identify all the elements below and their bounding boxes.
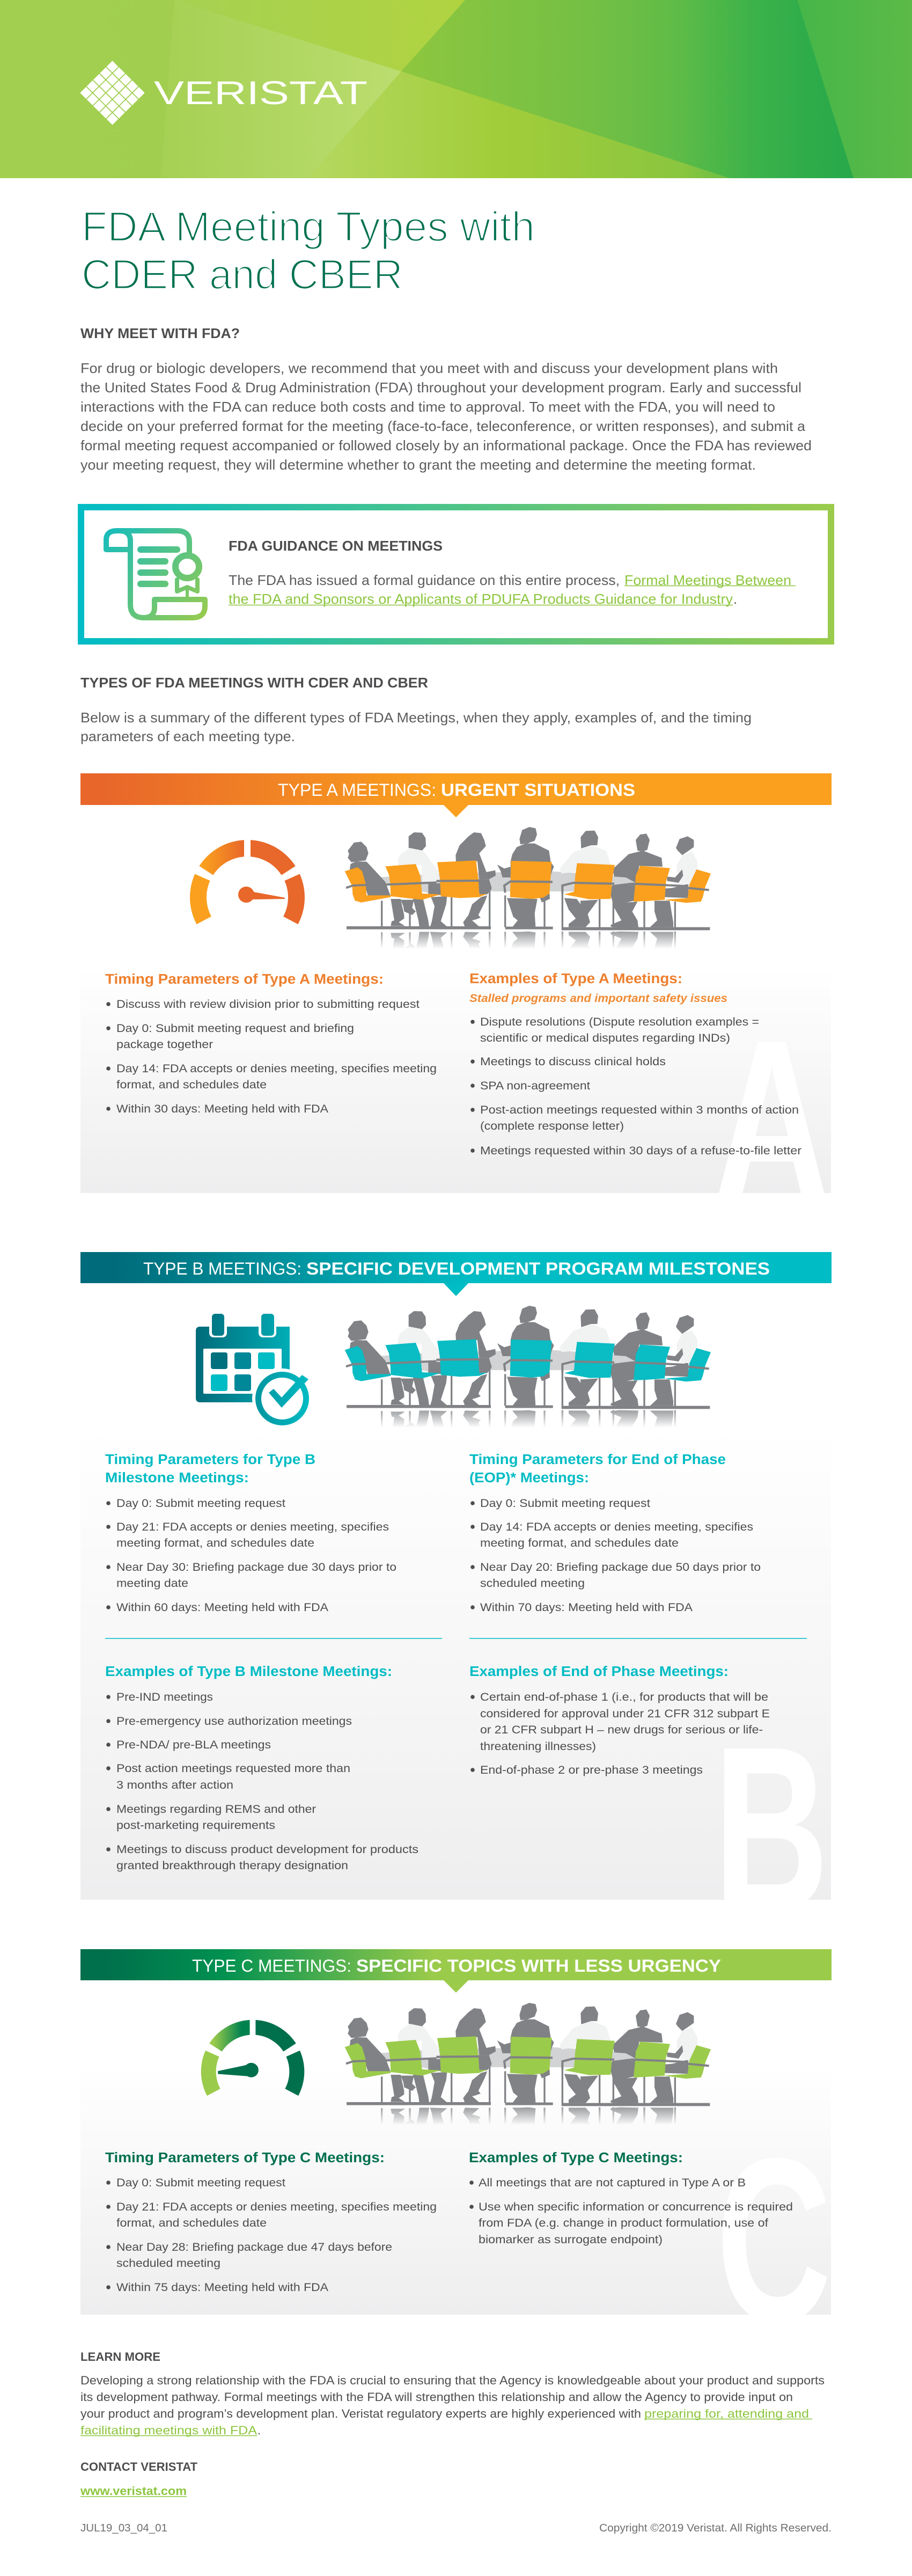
title: FDA Meeting Types with bbox=[82, 203, 535, 250]
list: examples EOP items: considered for approval under 21 CFR 312 subpart E bbox=[480, 1707, 770, 1720]
list: examples milestone items: granted breakthrough therapy designation bbox=[116, 1859, 348, 1872]
list: timing milestone items: Within 60 days: Meeting held with FDA bbox=[116, 1601, 329, 1614]
list: timing C items: Within 75 days: Meeting held with FDA bbox=[116, 2281, 329, 2294]
list: examples EOP items: or 21 CFR subpart H – new drugs for serious or life- bbox=[480, 1723, 763, 1736]
list: examples items: (complete response letter) bbox=[480, 1119, 624, 1132]
list: examples C items: biomarker as surrogate endpoint) bbox=[479, 2233, 663, 2246]
text block: guidance with link: . bbox=[733, 591, 737, 607]
text block: intro paragraph: the United States Food & Drug Administration (FDA) throughout your development program. Early and successful bbox=[80, 379, 801, 396]
illustration: meeting silhouettes bbox=[345, 2003, 711, 2150]
list: timing EOP items bbox=[470, 1497, 761, 1614]
big letter C: C bbox=[716, 2110, 832, 2371]
heading: timing EOP bbox=[469, 1452, 726, 1485]
subheading: stalled programs: Stalled programs and important safety issues bbox=[469, 992, 727, 1005]
list: examples C items: Use when specific information or concurrence is required bbox=[479, 2200, 793, 2213]
title bbox=[82, 203, 535, 298]
list: examples EOP items: threatening illnesses) bbox=[480, 1740, 596, 1753]
big letter A: A bbox=[712, 991, 831, 1253]
text block: intro paragraph: interactions with the FDA can reduce both costs and time to approval. To meet with the FDA, you will need to bbox=[80, 399, 775, 415]
list: timing C items bbox=[106, 2176, 437, 2294]
list: examples milestone items: Meetings regarding REMS and other bbox=[116, 1803, 316, 1816]
list: examples milestone items: Pre-IND meetings bbox=[116, 1690, 213, 1703]
panel: Type A meetings bbox=[80, 773, 832, 1193]
list: examples milestone items: 3 months after action bbox=[116, 1779, 233, 1791]
text block: intro paragraph bbox=[80, 360, 812, 473]
list: examples items: Meetings requested within 30 days of a refuse-to-file letter bbox=[480, 1144, 801, 1157]
list: timing items: Day 0: Submit meeting request and briefing bbox=[116, 1022, 354, 1035]
text block: summary: parameters of each meeting type. bbox=[80, 728, 295, 744]
list: examples items: Post-action meetings requested within 3 months of action bbox=[480, 1103, 799, 1116]
section: why meet with FDA bbox=[80, 325, 812, 473]
section: learn more bbox=[80, 2350, 825, 2437]
list: timing C items: scheduled meeting bbox=[116, 2257, 220, 2270]
title: CDER and CBER bbox=[82, 251, 403, 298]
banner: Type A bbox=[80, 773, 832, 817]
panel: FDA guidance on meetings bbox=[81, 507, 831, 641]
heading: types of meetings: TYPES OF FDA MEETINGS WITH CDER AND CBER bbox=[80, 675, 428, 691]
link: website: www.veristat.com bbox=[80, 2484, 187, 2498]
column: timing end of phase bbox=[469, 1452, 761, 1614]
section: types of meetings intro bbox=[80, 675, 752, 744]
text block: learn more paragraph: Developing a strong relationship with the FDA is crucial to ensuring that the Agency is knowledgeable about your product and supports bbox=[80, 2374, 825, 2387]
list: timing milestone items: meeting format, and schedules date bbox=[116, 1536, 314, 1549]
list: examples EOP items: End-of-phase 2 or pre-phase 3 meetings bbox=[480, 1763, 703, 1776]
list: examples milestone items: Post action meetings requested more than bbox=[116, 1762, 350, 1775]
list: examples items: Meetings to discuss clinical holds bbox=[480, 1055, 666, 1068]
text block: learn more paragraph: facilitating meetings with FDA bbox=[80, 2424, 257, 2437]
list: examples C items bbox=[469, 2176, 793, 2246]
list: timing items: format, and schedules date bbox=[116, 1078, 267, 1091]
icon: slow gauge bbox=[201, 2020, 304, 2096]
column: timing parameters bbox=[105, 972, 437, 1115]
heading: examples EOP: Examples of End of Phase Meetings: bbox=[469, 1664, 729, 1679]
heading: timing type C: Timing Parameters of Type C Meetings: bbox=[105, 2150, 385, 2165]
heading: learn more: LEARN MORE bbox=[80, 2350, 160, 2363]
banner: Type A: TYPE A MEETINGS: bbox=[278, 780, 436, 800]
list: timing C items: Near Day 28: Briefing package due 47 days before bbox=[116, 2241, 392, 2253]
list: examples items: scientific or medical disputes regarding INDs) bbox=[480, 1031, 730, 1044]
icon: scroll with seal bbox=[106, 531, 205, 618]
text block: intro paragraph: For drug or biologic developers, we recommend that you meet with and discuss your development plans with bbox=[80, 360, 778, 376]
list: timing EOP items: Within 70 days: Meeting held with FDA bbox=[480, 1601, 693, 1614]
list: examples items: Dispute resolutions (Dispute resolution examples = bbox=[480, 1015, 759, 1028]
big letter B: B bbox=[714, 1698, 829, 1959]
column: examples end of phase bbox=[469, 1664, 770, 1776]
list: timing EOP items: Near Day 20: Briefing package due 50 days prior to bbox=[480, 1561, 761, 1574]
list: examples EOP items: Certain end-of-phase 1 (i.e., for products that will be bbox=[480, 1690, 768, 1703]
icon: calendar with check bbox=[196, 1314, 314, 1429]
list: timing milestone items: Day 0: Submit meeting request bbox=[116, 1497, 285, 1510]
list: timing milestone items: Near Day 30: Briefing package due 30 days prior to bbox=[116, 1561, 396, 1574]
logo: Veristat bbox=[80, 61, 367, 125]
heading: guidance: FDA GUIDANCE ON MEETINGS bbox=[229, 538, 443, 554]
list: timing C items: Day 21: FDA accepts or denies meeting, specifies meeting bbox=[116, 2200, 437, 2213]
list: timing EOP items: Day 14: FDA accepts or denies meeting, specifies bbox=[480, 1520, 753, 1533]
panel: Type C meetings bbox=[80, 1949, 832, 2315]
list: timing EOP items: meeting format, and schedules date bbox=[480, 1536, 679, 1549]
text block: summary bbox=[80, 709, 752, 744]
header banner bbox=[0, 0, 912, 178]
heading: timing type B: Milestone Meetings: bbox=[105, 1470, 249, 1485]
banner: Type C bbox=[80, 1949, 832, 1993]
column: examples bbox=[469, 971, 801, 1157]
logo wordmark: VERISTAT bbox=[154, 75, 367, 111]
list: examples C items: from FDA (e.g. change in product formulation, use of bbox=[479, 2216, 768, 2229]
heading: timing EOP: Timing Parameters for End of Phase bbox=[469, 1452, 726, 1467]
list: timing items: Within 30 days: Meeting held with FDA bbox=[116, 1102, 329, 1115]
heading: timing type B: Timing Parameters for Type B bbox=[105, 1452, 315, 1467]
footer: copyright: Copyright ©2019 Veristat. All Rights Reserved. bbox=[599, 2522, 832, 2534]
column: timing type C bbox=[105, 2150, 437, 2294]
list: timing C items: Day 0: Submit meeting request bbox=[116, 2176, 285, 2189]
banner: Type B: TYPE B MEETINGS: bbox=[143, 1259, 301, 1278]
list: timing milestone items: Day 21: FDA accepts or denies meeting, specifies bbox=[116, 1520, 389, 1533]
text block: guidance with link: The FDA has issued a formal guidance on this entire process, bbox=[229, 572, 620, 588]
text block: learn more paragraph: your product and program’s development plan. Veristat regulatory experts are highly experienced with bbox=[80, 2407, 641, 2420]
banner: Type C: TYPE C MEETINGS: bbox=[192, 1956, 351, 1975]
list: examples items: SPA non-agreement bbox=[480, 1079, 590, 1092]
heading: timing type A: Timing Parameters of Type A Meetings: bbox=[105, 972, 384, 987]
list: examples milestone items: post-marketing requirements bbox=[116, 1819, 275, 1832]
column: timing milestone bbox=[105, 1452, 396, 1614]
list: examples milestone items bbox=[106, 1690, 418, 1872]
banner: Type B: SPECIFIC DEVELOPMENT PROGRAM MILESTONES bbox=[306, 1259, 770, 1278]
list: timing EOP items: Day 0: Submit meeting request bbox=[480, 1497, 650, 1510]
text block: learn more paragraph: . bbox=[258, 2424, 261, 2437]
list: examples milestone items: Meetings to discuss product development for products bbox=[116, 1843, 418, 1856]
list: examples C items: All meetings that are not captured in Type A or B bbox=[479, 2176, 746, 2189]
icon: diamond grid bbox=[80, 61, 145, 125]
banner: Type C: SPECIFIC TOPICS WITH LESS URGENCY bbox=[356, 1956, 721, 1975]
list: examples milestone items: Pre-emergency use authorization meetings bbox=[116, 1715, 352, 1728]
icon: fast gauge bbox=[190, 840, 305, 924]
list: timing items bbox=[106, 998, 437, 1115]
list: examples items bbox=[470, 1015, 801, 1157]
text block: guidance with link: Formal Meetings Between bbox=[624, 572, 791, 588]
list: timing milestone items: meeting date bbox=[116, 1577, 188, 1590]
heading: timing EOP: (EOP)* Meetings: bbox=[469, 1470, 589, 1485]
text block: intro paragraph: formal meeting request accompanied or followed closely by an informational package. Once the FDA has reviewed bbox=[80, 437, 812, 453]
heading: examples type C: Examples of Type C Meetings: bbox=[469, 2150, 683, 2165]
list: timing C items: format, and schedules date bbox=[116, 2216, 267, 2229]
text block: learn more paragraph: its development pathway. Formal meetings with the FDA will strengthen this relationship and allow the Agency to provide input on bbox=[80, 2390, 793, 2404]
banner: Type A: URGENT SITUATIONS bbox=[441, 780, 635, 800]
list: timing EOP items: scheduled meeting bbox=[480, 1577, 585, 1590]
text block: learn more paragraph: preparing for, attending and bbox=[644, 2407, 809, 2420]
column: examples type C bbox=[469, 2150, 793, 2246]
text block: intro paragraph: decide on your preferred format for the meeting (face-to-face, teleconference, or written responses), and submit a bbox=[80, 418, 806, 434]
panel: Type B meetings bbox=[80, 1252, 832, 1959]
text block: summary: Below is a summary of the different types of FDA Meetings, when they apply, examples of, and the timing bbox=[80, 709, 752, 726]
heading: contact: CONTACT VERISTAT bbox=[80, 2460, 198, 2473]
text block: intro paragraph: your meeting request, they will determine whether to grant the meeting and determine the meeting format. bbox=[80, 457, 756, 473]
text block: guidance with link bbox=[229, 572, 796, 607]
list: examples EOP items bbox=[470, 1690, 770, 1776]
heading: examples type B: Examples of Type B Milestone Meetings: bbox=[105, 1664, 392, 1679]
list: examples milestone items: Pre-NDA/ pre-BLA meetings bbox=[116, 1738, 271, 1751]
footer: document code: JUL19_03_04_01 bbox=[80, 2522, 167, 2534]
heading: why meet: WHY MEET WITH FDA? bbox=[80, 325, 240, 341]
section: contact bbox=[80, 2460, 198, 2498]
list: timing items: Day 14: FDA accepts or denies meeting, specifies meeting bbox=[116, 1062, 437, 1075]
heading: timing type B bbox=[105, 1452, 315, 1485]
list: timing items: Discuss with review division prior to submitting request bbox=[116, 998, 420, 1011]
banner: Type B bbox=[80, 1252, 832, 1296]
heading: examples type A: Examples of Type A Meetings: bbox=[469, 971, 682, 986]
text block: guidance with link: the FDA and Sponsors or Applicants of PDUFA Products Guidance for Industry bbox=[229, 591, 733, 607]
list: timing items: package together bbox=[116, 1038, 213, 1051]
list: timing milestone items bbox=[106, 1497, 396, 1614]
illustration: meeting silhouettes bbox=[345, 827, 711, 975]
illustration: meeting silhouettes bbox=[345, 1306, 711, 1453]
column: examples milestone bbox=[105, 1664, 418, 1872]
text block: learn more paragraph bbox=[80, 2374, 825, 2437]
